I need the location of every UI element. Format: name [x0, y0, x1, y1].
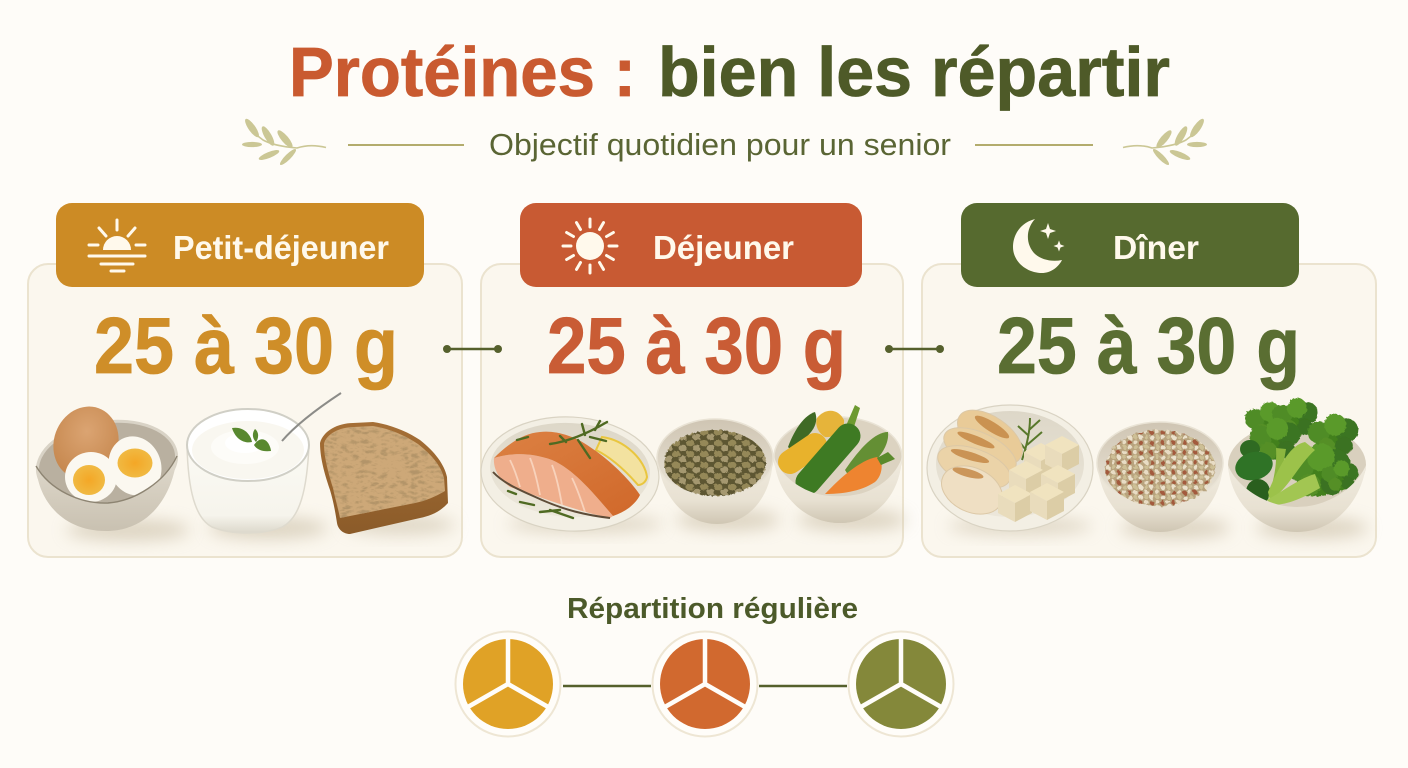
panel: déjeuner	[478, 203, 907, 557]
connector between lunch and dinner	[885, 345, 944, 353]
distribution diagram	[456, 632, 954, 736]
food: bread slice	[320, 422, 455, 535]
amount: 25 à 30 g	[94, 301, 398, 390]
meal tab: Dîner	[1113, 229, 1199, 266]
amount: 25 à 30 g	[997, 301, 1300, 390]
meal tab	[961, 203, 1299, 287]
title	[289, 33, 1170, 111]
pie: green	[848, 632, 954, 736]
amount: 25 à 30 g	[547, 301, 846, 390]
food: yogurt glass	[187, 393, 341, 539]
meal tab	[520, 203, 862, 287]
chicken slices	[932, 399, 1032, 523]
icon: spoon	[282, 393, 341, 441]
title: Protéines :	[289, 33, 636, 111]
meal tab	[56, 203, 424, 287]
food: chicken and tofu plate	[927, 399, 1093, 535]
salmon	[494, 454, 613, 518]
icon: right olive sprig	[1123, 117, 1207, 167]
subtitle with sprigs	[242, 117, 1207, 167]
heading: répartition régulière: Répartition régulière	[567, 593, 858, 625]
panel: dîner	[922, 203, 1376, 557]
food: vegetables bowl	[774, 405, 907, 531]
food: salmon plate	[478, 412, 663, 536]
food: quinoa bowl	[1097, 422, 1230, 539]
food: eggs in bowl	[32, 397, 190, 541]
herbs	[508, 421, 607, 518]
icon: left olive sprig	[242, 117, 326, 167]
food: broccoli bowl	[1228, 398, 1368, 539]
icon: moon and stars	[1013, 219, 1064, 273]
meal tab: Petit-déjeuner	[173, 229, 389, 266]
panel card	[922, 264, 1376, 557]
link lines	[563, 685, 651, 687]
pie: yellow	[456, 632, 560, 736]
pie: orange	[652, 632, 758, 736]
lemon	[596, 437, 647, 485]
herb	[1016, 418, 1042, 460]
connector between breakfast and lunch	[443, 345, 502, 353]
icon: mint leaf	[232, 428, 271, 451]
subtitle text: Objectif quotidien pour un senior	[489, 127, 951, 162]
tofu cubes	[1024, 443, 1058, 480]
panel card	[481, 264, 903, 557]
icon: sun	[563, 219, 617, 273]
panel: petit-déjeuner	[28, 203, 462, 557]
food: lentils bowl	[657, 419, 780, 531]
panel card	[28, 264, 462, 557]
icon: sunrise	[89, 220, 145, 271]
title: bien les répartir	[658, 33, 1170, 111]
meal tab: Déjeuner	[653, 229, 794, 266]
